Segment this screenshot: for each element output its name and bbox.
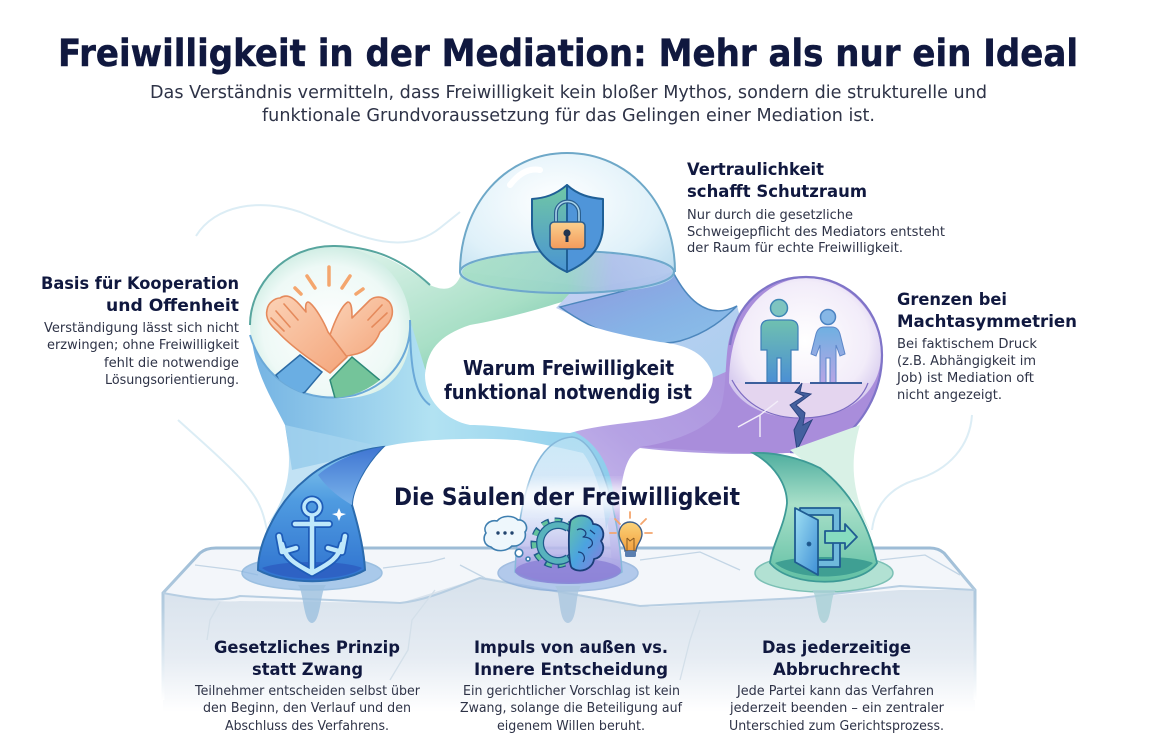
- icon: door and arrow: [795, 508, 857, 575]
- text: Grenzen: [896, 290, 1077, 403]
- text: Basis für Kooperation: fehlt die notwendige: [104, 356, 239, 371]
- pillar: center: [498, 437, 638, 623]
- text: Grenzen: Grenzen bei: [897, 290, 1007, 310]
- subtitle: [150, 82, 987, 126]
- icon: lightbulb: [610, 512, 652, 557]
- icon: padlock: [550, 202, 585, 249]
- title: Freiwilligkeit in der Mediation: Mehr als nur ein Ideal: [58, 32, 1078, 75]
- icon: thought cloud: [484, 516, 530, 561]
- icon: sleeves: [276, 355, 382, 400]
- text: Impuls: Zwang, solange die Beteiligung auf: [460, 701, 682, 716]
- icon: tall person: [761, 300, 798, 383]
- icon: brain: [569, 516, 603, 571]
- icon: gear: [535, 522, 577, 564]
- text: Vertraulichkeit: Vertraulichkeit: [687, 160, 824, 180]
- text: Abbruchrecht: Das jederzeitige: [762, 638, 911, 658]
- ribbon: violet to center: [570, 370, 800, 570]
- text: Impuls: eigenem Willen beruht.: [497, 719, 645, 734]
- text: Impuls: Innere Entscheidung: [474, 660, 668, 680]
- text: Abbruchrecht: Abbruchrecht: [773, 660, 900, 680]
- bubble: power asymmetry: [640, 277, 882, 454]
- text: Gesetzliches Prinzip: Gesetzliches Prinzip: [214, 638, 400, 658]
- text: Basis für Kooperation: [41, 274, 239, 388]
- ice platform: [163, 548, 975, 738]
- text: Gesetzliches Prinzip: statt Zwang: [252, 660, 363, 680]
- text: Grenzen: Machtasymmetrien: [897, 312, 1077, 332]
- text: Basis für Kooperation: und Offenheit: [106, 296, 239, 316]
- ribbon: green hands to dome: [330, 247, 600, 380]
- icon: small person: [811, 310, 845, 383]
- subtitle: funktionale Grundvoraussetzung für das Gelingen einer Mediation ist.: [262, 105, 875, 126]
- text: Vertraulichkeit: schafft Schutzraum: [687, 182, 867, 202]
- text: Gesetzliches Prinzip: [194, 638, 421, 734]
- text: Impuls: Impuls von außen vs.: [474, 638, 668, 658]
- heading: Warum Freiwilligkeit: [444, 356, 692, 404]
- text: Impuls: [460, 638, 682, 734]
- decorative pale curves: [178, 205, 972, 535]
- icon: shield: [532, 185, 603, 272]
- heading: Die Säulen: Die Säulen der Freiwilligkeit: [394, 483, 740, 511]
- text: Gesetzliches Prinzip: den Beginn, den Verlauf und den: [203, 701, 411, 716]
- text: Abbruchrecht: jederzeit beenden – ein zentraler: [729, 701, 945, 716]
- text: Abbruchrecht: Jede Partei kann das Verfahren: [736, 684, 934, 699]
- icon: clasped hands: [267, 296, 392, 373]
- text: Grenzen: nicht angezeigt.: [897, 388, 1002, 403]
- icon: anchor: [279, 499, 345, 573]
- text: Basis für Kooperation: Lösungsorientierung.: [105, 373, 239, 388]
- text: Vertraulichkeit: [687, 160, 945, 256]
- center white hole: [425, 310, 713, 433]
- bubble: hands: [250, 246, 430, 405]
- pillar: exit door: [753, 425, 893, 623]
- text: Grenzen: (z.B. Abhängigkeit im: [897, 354, 1036, 369]
- text: Gesetzliches Prinzip: Teilnehmer entscheiden selbst über: [194, 684, 421, 699]
- ribbon: dome to power bubble: [556, 272, 760, 400]
- text halo: pillars heading: [440, 484, 740, 510]
- text: Grenzen: Job) ist Mediation oft: [896, 371, 1034, 386]
- text: Vertraulichkeit: Schweigepflicht des Mediators entsteht: [687, 225, 945, 240]
- text: Basis für Kooperation: Basis für Kooperation: [41, 274, 239, 294]
- text: Basis für Kooperation: erzwingen; ohne Freiwilligkeit: [47, 338, 239, 353]
- pillar: anchor: [242, 425, 383, 623]
- text: Abbruchrecht: [729, 638, 945, 734]
- icon: ground line and crack: [738, 383, 862, 450]
- text: Impuls: Ein gerichtlicher Vorschlag ist kein: [463, 684, 680, 699]
- icon: sun rays: [295, 267, 363, 294]
- text: Abbruchrecht: Unterschied zum Gerichtsprozess.: [729, 719, 944, 734]
- text: Grenzen: Bei faktischem Druck: [897, 337, 1037, 352]
- heading: Warum Freiwilligkeit: funktional notwendig ist: [444, 380, 692, 404]
- dome: confidentiality: [460, 153, 675, 293]
- text: Vertraulichkeit: Nur durch die gesetzliche: [687, 208, 853, 223]
- text: Vertraulichkeit: der Raum für echte Freiwilligkeit.: [687, 241, 903, 256]
- text: Gesetzliches Prinzip: Abschluss des Verfahrens.: [225, 719, 389, 734]
- text: Basis für Kooperation: Verständigung lässt sich nicht: [44, 321, 239, 336]
- ribbon: blue band left: [250, 320, 614, 530]
- subtitle: Das Verständnis vermitteln, dass Freiwilligkeit kein bloßer Mythos, sondern die strukturelle und: [150, 82, 987, 103]
- heading: Warum Freiwilligkeit: Warum Freiwilligkeit: [463, 356, 674, 380]
